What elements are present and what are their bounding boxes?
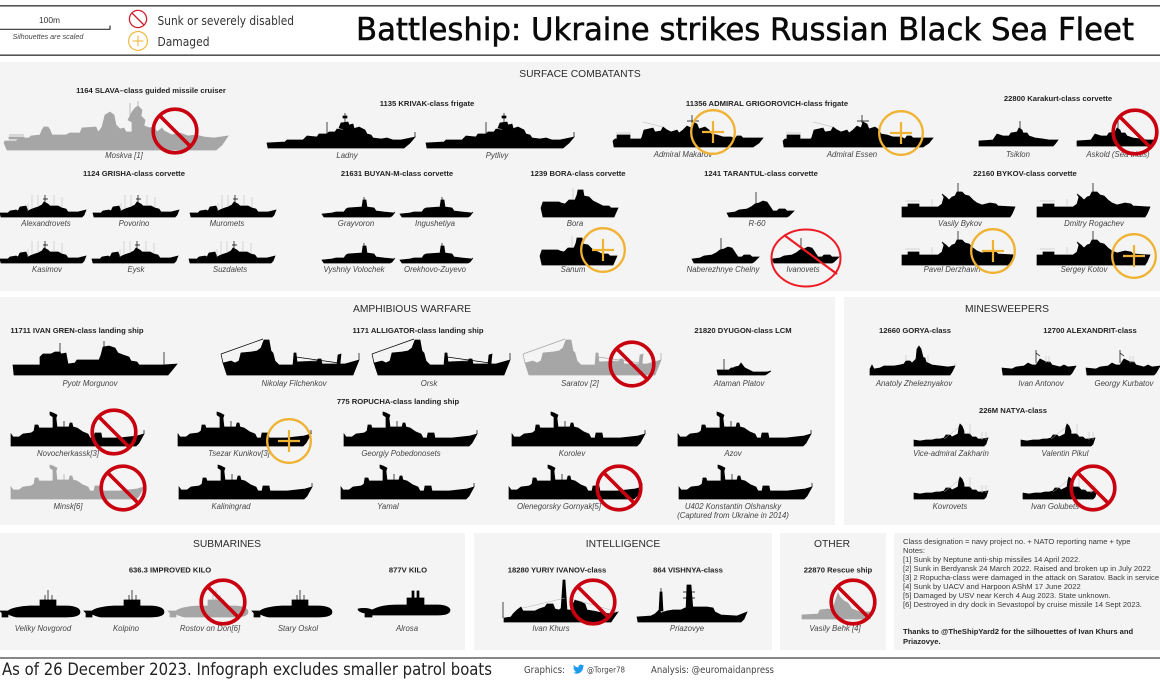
ship: Azov: Azov [723,449,743,458]
ship: Sergey Kotov [1037,231,1156,278]
ship: Grayvoron [322,197,395,228]
ship: Bora [541,188,618,228]
class heading: Alligator: 1171 ALLIGATOR-class landing ship [352,326,484,335]
scale bar [0,15,110,41]
ship: Ivanovets: Ivanovets [786,265,820,274]
ship: U402 Konstantin Olshansky: (Captured from Ukraine in 2014) [677,511,789,520]
ship: Pavel Derzhavin: Pavel Derzhavin [924,265,980,274]
ship: Anatoly Zheleznyakov [870,346,955,388]
legend label: sunk: Sunk or severely disabled [158,14,294,28]
heading: surface combatants: SURFACE COMBATANTS [519,69,641,80]
ship: Povorino [93,195,179,228]
sub: Stary Oskol [252,590,332,633]
ship: Ladny: Ladny [336,151,359,160]
ship: Saratov: Saratov [2] [561,379,600,388]
ship: Askold: Askold (Sea trials) [1085,150,1150,159]
ship: Ivan Golubets [1023,466,1115,511]
sub: Kolpino: Kolpino [113,624,140,633]
heading: other: OTHER [814,539,850,550]
ship: Nikolay Filchenkov: Nikolay Filchenkov [262,379,328,388]
ship: Korolev [512,412,645,458]
ship: Ivan Khurs [503,580,618,633]
ship: Ivan Khurs: Ivan Khurs [532,624,570,633]
ship: Admiral Makarov: Admiral Makarov [653,150,713,159]
ship: Pytlivy [426,113,574,160]
ship: Kasimov: Kasimov [32,265,63,274]
graphics credit: Graphics: [524,665,565,676]
ship: Vasily Bekh: Vasily Behk [4] [809,624,861,633]
ship: Orekhovo-Zuyevo [400,243,473,274]
ship: Olenegorsky Gornyak [509,465,642,511]
ship: Admiral Essen: Admiral Essen [826,150,877,159]
sub: Veliky Novgorod: Veliky Novgorod [15,624,72,633]
class heading: Krivak: 1135 KRIVAK-class frigate [380,99,474,108]
ship: Georgy Kurbatov [1086,350,1160,388]
sub: Stary Oskol: Stary Oskol [278,624,318,633]
panel: surface combatants [0,62,1160,291]
ship: Grayvoron: Grayvoron [338,219,374,228]
panel: minesweepers [844,297,1160,525]
ship: Priazovye [637,585,747,633]
sub: Alrosa: Alrosa [395,624,419,633]
ship: Sergey Kotov: Sergey Kotov [1061,265,1109,274]
ship: Ivan Antonov [1002,350,1076,388]
panel: other [780,533,886,650]
heading: amphibious warfare: AMPHIBIOUS WARFARE [353,304,471,315]
ship: Dmitry Rogachev [1037,183,1150,228]
ship: Eysk [92,241,178,274]
ship: Muromets [190,195,276,228]
ship: U402 Konstantin Olshansky: U402 Konstantin Olshansky [685,502,782,511]
class heading: Ropucha: 775 ROPUCHA-class landing ship [337,397,459,406]
ship: Bora: Bora [567,219,584,228]
class heading: Gorya: 12660 GORYA-class [879,326,951,335]
class heading: 877V Kilo: 877V KILO [389,566,427,574]
ship: Sanum: Sanum [561,265,586,274]
ship: Pavel Derzhavin [902,229,1015,274]
title: Battleship: Ukraine strikes Russian Black Sea Fleet [356,12,1134,48]
legend label: damaged: Damaged [158,35,210,49]
heading: intelligence: INTELLIGENCE [586,539,660,550]
ship: Ladny [267,113,415,160]
scale bar: Silhouettes are scaled [13,32,84,41]
class heading: Natya: 226M NATYA-class [979,406,1047,415]
class heading: Karakurt: 22800 Karakurt-class corvette [1004,94,1112,103]
class heading: Vishnya: 864 VISHNYA-class [653,566,723,574]
ship: Georgiy Pobedonosets: Georgiy Pobedonosets [361,449,441,458]
ship: Novocherkassk: Novocherkassk[3] [37,449,100,458]
panel: submarines [0,533,465,650]
ship: Ataman Platov [713,359,771,388]
notes text: [4] Sunk by UACV and Harpoon AShM 17 June 2022 [903,582,1081,591]
ship: Kovrovets: Kovrovets [933,502,967,511]
ship: Yamal: Yamal [377,502,399,511]
credits note: Thanks to @TheShipYard2 for the silhouettes of Ivan Khurs and [903,627,1134,636]
icon: twitter bird [573,665,584,674]
class heading: Ivan Gren: 11711 IVAN GREN-class landing ship [10,326,144,335]
heading: minesweepers: MINESWEEPERS [965,304,1049,315]
ship: Moskva: Moskva [1] [105,151,144,160]
class heading: Rescue ship: 22870 Rescue ship [804,566,873,574]
ship: Orsk: Orsk [421,379,438,388]
ship: Tsezar Kunikov [178,412,311,463]
ship: Suzdalets: Suzdalets [213,265,247,274]
class heading: Admiral Grigorovich: 11356 ADMIRAL GRIGOROVICH-class frigate [686,99,848,108]
ship: R-60: R-60 [749,219,766,228]
ship: Muromets: Muromets [210,219,244,228]
credits note: Priazovye. [903,637,941,646]
ship: Orekhovo-Zuyevo: Orekhovo-Zuyevo [404,265,467,274]
ship: Alexandrovets [0,195,86,228]
ship: Naberezhnye Chelny: Naberezhnye Chelny [687,265,761,274]
ship: Suzdalets [189,241,275,274]
sub: Rostov on Don [168,580,248,633]
notes text [903,537,1159,609]
ship: Pyotr Morgunov [13,341,177,388]
legend [129,10,294,50]
heading: submarines: SUBMARINES [193,539,261,550]
analysis credit: Analysis: @euromaidanpress [651,665,774,676]
header bar [0,5,1160,56]
notes text: Class designation = navy project no. + NATO reporting name + type [903,537,1130,546]
ship: Moskva [4,101,228,160]
ship: U402 Konstantin Olshansky [677,465,812,520]
notes text: Notes: [903,546,925,555]
ship: Azov [678,412,811,458]
graphics credit: @Torger78 [587,666,625,674]
ship: Ivan Golubets: Ivan Golubets [1031,502,1079,511]
ship: Tsezar Kunikov: Tsezar Kunikov[3] [208,449,271,458]
class heading: Buyan-M: 21631 BUYAN-M-class corvette [341,169,453,178]
footer [0,657,1160,679]
class heading: Yuriy Ivanov: 18280 YURIY IVANOV-class [508,566,606,574]
ship: Priazovye: Priazovye [670,624,705,633]
ship: Saratov [523,339,661,388]
ship: Korolev: Korolev [559,449,586,458]
ship: Vasily Bykov: Vasily Bykov [938,219,983,228]
class heading: Improved Kilo: 636.3 IMPROVED KILO [129,566,211,574]
ship: Ingushetiya [400,197,473,228]
ship: Askold [1077,110,1157,159]
sub: Alrosa [358,591,450,633]
ship: Admiral Essen [783,111,933,159]
ship: Alexandrovets: Alexandrovets [20,219,71,228]
graphics credit [524,665,625,676]
notes text: [3] 2 Ropucha-class were damaged in the attack on Saratov. Back in service [903,573,1159,582]
credits note [903,627,1134,646]
notes text: [5] Damaged by USV near Kerch 4 Aug 2023. State unknown. [903,591,1111,600]
notes text: [6] Destroyed in dry dock in Sevastopol by cruise missile 14 Sept 2023. [903,600,1142,609]
footer note: As of 26 December 2023. Infograph excludes smaller patrol boats [2,660,492,679]
class heading: Dyugon: 21820 DYUGON-class LCM [694,326,792,335]
scale bar: 100m [39,15,60,25]
class heading: Tarantul: 1241 TARANTUL-class corvette [704,169,818,178]
panel: notes [894,533,1160,650]
class heading: Bora: 1239 BORA-class corvette [530,169,626,178]
ship: Ivan Antonov: Ivan Antonov [1018,379,1065,388]
ship: Pytlivy: Pytlivy [486,151,509,160]
ship: Ivanovets [772,230,840,286]
class heading: Alexandrit: 12700 ALEXANDRIT-class [1043,326,1137,335]
ship: Kaliningrad [179,465,312,511]
ship: Anatoly Zheleznyakov: Anatoly Zheleznyakov [875,379,953,388]
ship: Ingushetiya: Ingushetiya [415,219,456,228]
ship: Valentin Pikul [1021,424,1095,458]
ship: Valentin Pikul: Valentin Pikul [1042,449,1089,458]
ship: Georgy Kurbatov: Georgy Kurbatov [1095,379,1155,388]
ship: Admiral Makarov [613,110,763,159]
ship: Kovrovets [914,477,988,511]
ship: Povorino: Povorino [119,219,150,228]
ship: Kasimov [0,241,86,274]
sub: Kolpino [84,590,164,633]
icon: sunk [129,10,147,28]
class heading: Bykov: 22160 BYKOV-class corvette [973,169,1077,178]
ship: Novocherkassk [11,410,144,458]
ship: Vasily Bykov [902,183,1015,228]
ship: Olenegorsky Gornyak: Olenegorsky Gornyak[5] [517,502,602,511]
ship: Vyshniy Volochek: Vyshniy Volochek [323,265,386,274]
ship: R-60 [727,192,794,228]
notes text: [1] Sunk by Neptune anti-ship missiles 14 April 2022. [903,555,1080,564]
ship: Vice-admiral Zakharin: Vice-admiral Zakharin [913,449,989,458]
class heading: Grisha: 1124 GRISHA-class corvette [83,169,185,178]
ship: Tsiklon: Tsiklon [1006,150,1030,159]
ship: Ataman Platov: Ataman Platov [713,379,765,388]
ship: Naberezhnye Chelny [687,238,761,274]
icon: damaged [129,32,147,50]
ship: Vyshniy Volochek [322,243,395,274]
ship: Kaliningrad: Kaliningrad [211,502,251,511]
ship: Minsk [11,465,145,511]
ship: Eysk: Eysk [128,265,146,274]
ship: Minsk: Minsk[6] [53,502,83,511]
ship: Vice-admiral Zakharin [913,424,989,458]
class heading: Slava: 1164 SLAVA–class guided missile cruiser [76,86,226,95]
sub: Rostov on Don: Rostov on Don[6] [180,624,241,633]
sub: Veliky Novgorod [0,590,80,633]
ship: Nikolay Filchenkov [221,339,359,388]
ship: Dmitry Rogachev: Dmitry Rogachev [1064,219,1125,228]
ship: Orsk [372,339,510,388]
ship: Georgiy Pobedonosets [344,412,477,458]
ship: Sanum [540,228,625,274]
ship: Tsiklon [979,121,1058,159]
panel: intelligence [474,533,772,650]
ship: Yamal [341,465,474,511]
panel: amphibious warfare [0,297,835,525]
notes text: [2] Sunk in Berdyansk 24 March 2022. Raised and broken up in July 2022 [903,564,1151,573]
ship: Pyotr Morgunov: Pyotr Morgunov [62,379,119,388]
